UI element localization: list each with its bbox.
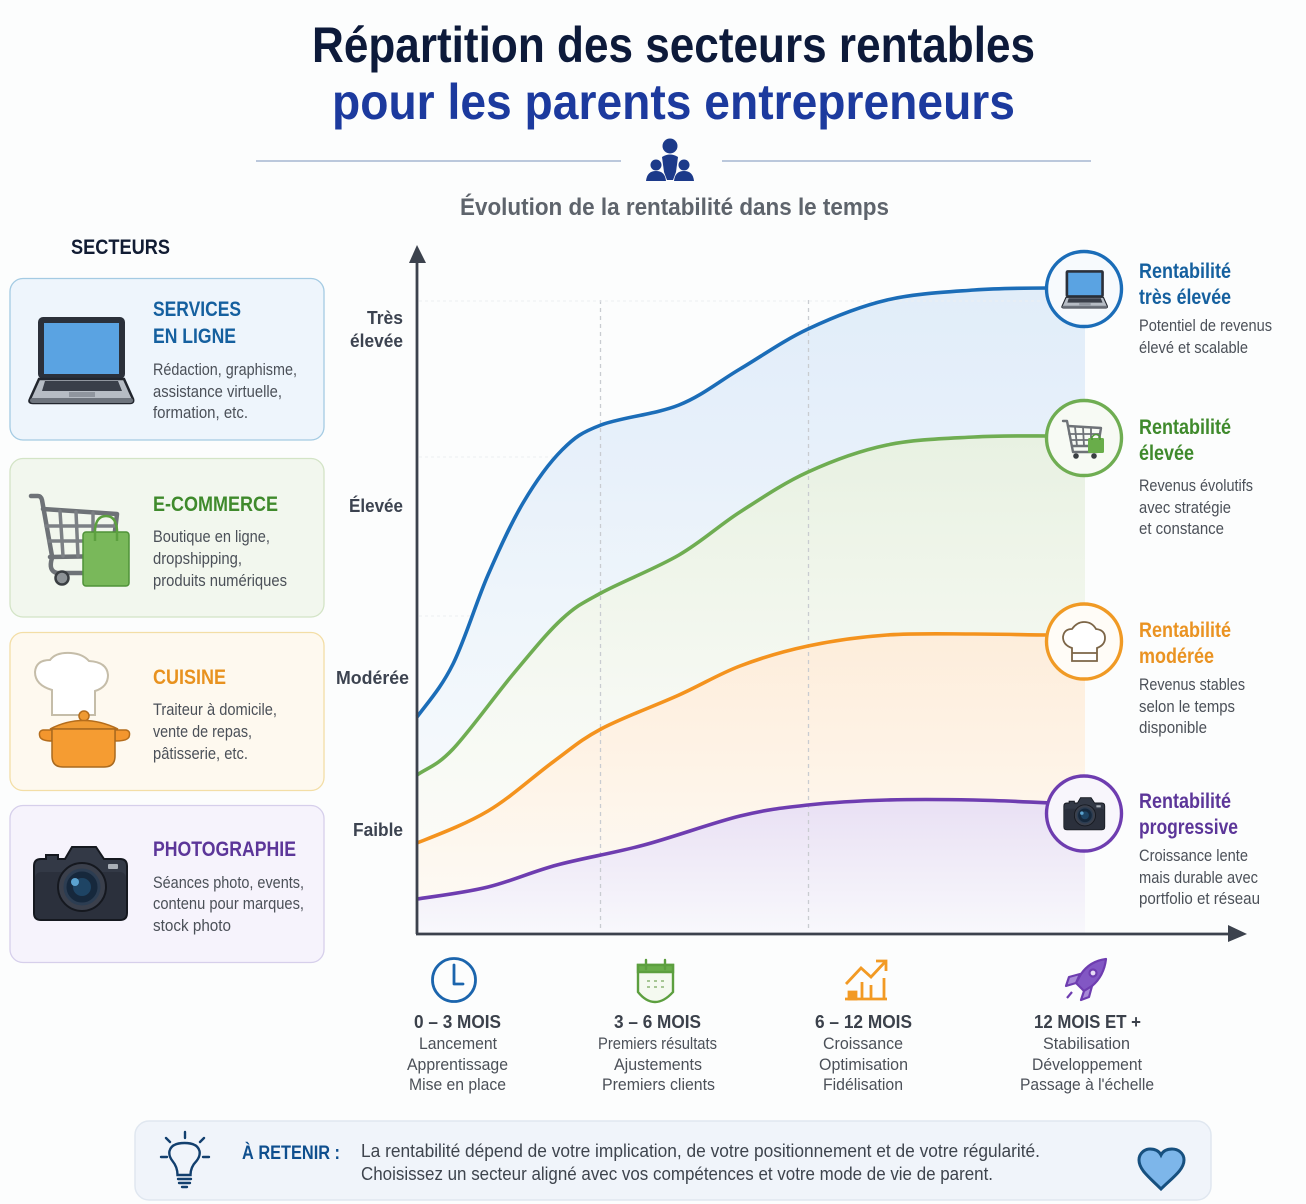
time phase: 3-6 mois: 3 – 6 MOIS bbox=[614, 1012, 701, 1032]
outcome label: progressive: mais durable avec bbox=[1139, 869, 1258, 887]
sector text: photographie bbox=[153, 838, 304, 935]
x axis arrow bbox=[416, 925, 1247, 942]
panel: services en ligne bbox=[10, 278, 324, 440]
y axis labels: Modérée bbox=[336, 668, 409, 688]
time phase: 12 mois et + bbox=[1020, 1012, 1154, 1094]
panel: e-commerce bbox=[10, 458, 324, 617]
time phase: 3-6 mois: Premiers clients bbox=[602, 1075, 715, 1094]
sector text: services en ligne: EN LIGNE bbox=[153, 325, 236, 348]
time phase: 12 mois et +: 12 MOIS ET + bbox=[1034, 1012, 1141, 1032]
header divider bbox=[256, 160, 1091, 162]
outcome label: élevée: avec stratégie bbox=[1139, 499, 1231, 517]
sector text: photographie: contenu pour marques, bbox=[153, 895, 304, 913]
callout text: Choisissez un secteur aligné avec vos compétences et votre mode de vie de parent. bbox=[361, 1164, 993, 1184]
time phase: 0-3 mois: Apprentissage bbox=[407, 1055, 508, 1074]
outcome label: progressive: portfolio et réseau bbox=[1139, 890, 1260, 908]
title bbox=[312, 17, 1035, 130]
sector text: e-commerce: E-COMMERCE bbox=[153, 493, 278, 516]
sector text: e-commerce: dropshipping, bbox=[153, 550, 242, 568]
icon: lightbulb bbox=[161, 1132, 209, 1187]
time phase: 6-12 mois bbox=[815, 1012, 912, 1094]
icon: chef hat and pot bbox=[35, 653, 130, 767]
sector text: e-commerce: Boutique en ligne, bbox=[153, 528, 270, 546]
outcome label: modérée: Rentabilité bbox=[1139, 619, 1231, 642]
curve: e-commerce bbox=[417, 436, 1050, 775]
sector text: services en ligne: assistance virtuelle, bbox=[153, 383, 282, 401]
callout: à retenir bbox=[135, 1121, 1211, 1200]
icon: cart and bag bbox=[31, 496, 129, 586]
panel: cuisine bbox=[10, 632, 324, 790]
time phase: 0-3 mois: Lancement bbox=[419, 1034, 497, 1053]
sector text: cuisine: CUISINE bbox=[153, 666, 226, 689]
sector text: services en ligne: SERVICES bbox=[153, 298, 241, 321]
icon: camera bbox=[34, 847, 127, 920]
outcome label: très élevée: élevé et scalable bbox=[1139, 339, 1248, 357]
y axis labels: Élevée bbox=[349, 495, 403, 516]
outcome label: modérée: modérée bbox=[1139, 645, 1214, 668]
curve: photographie bbox=[417, 800, 1050, 899]
sector text: e-commerce: produits numériques bbox=[153, 572, 287, 590]
time phase: 0-3 mois: Mise en place bbox=[409, 1075, 506, 1094]
time phase: 12 mois et +: Développement bbox=[1032, 1055, 1142, 1074]
curve: services en ligne bbox=[417, 288, 1050, 717]
outcome label: très élevée bbox=[1139, 260, 1272, 357]
outcome label: élevée: Rentabilité bbox=[1139, 416, 1231, 439]
curve: cuisine bbox=[417, 634, 1050, 843]
marker: laptop bbox=[1046, 252, 1122, 326]
sector text: services en ligne bbox=[153, 298, 297, 422]
outcome label: progressive: progressive bbox=[1139, 816, 1238, 839]
icon: heart bbox=[1139, 1149, 1184, 1189]
title: pour les parents entrepreneurs bbox=[332, 74, 1015, 130]
icon: family bbox=[646, 138, 694, 181]
time phase: 12 mois et +: Passage à l'échelle bbox=[1020, 1075, 1154, 1094]
outcome label: très élevée: Potentiel de revenus bbox=[1139, 317, 1272, 335]
time phase: 3-6 mois: Ajustements bbox=[614, 1055, 702, 1074]
time phase: 6-12 mois: 6 – 12 MOIS bbox=[815, 1012, 912, 1032]
outcome label: modérée: Revenus stables bbox=[1139, 676, 1245, 694]
icon: calendar bbox=[638, 960, 673, 1002]
line chart bbox=[417, 288, 1085, 934]
icon: clock bbox=[432, 958, 476, 1002]
time phase: 6-12 mois: Optimisation bbox=[819, 1055, 908, 1074]
sector text: cuisine bbox=[153, 666, 277, 763]
outcome label: élevée: élevée bbox=[1139, 442, 1194, 465]
sectors heading: SECTEURS bbox=[71, 236, 170, 259]
outcome label: modérée: selon le temps bbox=[1139, 698, 1235, 716]
time phase: 0-3 mois bbox=[407, 1012, 508, 1094]
marker: cart bbox=[1046, 400, 1122, 476]
time phase: 6-12 mois: Croissance bbox=[823, 1034, 903, 1053]
sector text: services en ligne: Rédaction, graphisme, bbox=[153, 361, 297, 379]
callout label: À RETENIR : bbox=[242, 1142, 340, 1164]
time phase: 0-3 mois: 0 – 3 MOIS bbox=[414, 1012, 501, 1032]
time phase: 6-12 mois: Fidélisation bbox=[823, 1075, 903, 1094]
outcome label: progressive: Rentabilité bbox=[1139, 790, 1231, 813]
outcome label: modérée bbox=[1139, 619, 1245, 737]
outcome label: très élevée: Rentabilité bbox=[1139, 260, 1231, 283]
sector text: cuisine: pâtisserie, etc. bbox=[153, 745, 248, 763]
subtitle: Évolution de la rentabilité dans le temps bbox=[460, 193, 889, 221]
outcome label: très élevée: très élevée bbox=[1139, 286, 1231, 309]
y axis labels: Faible bbox=[353, 820, 403, 840]
sector text: services en ligne: formation, etc. bbox=[153, 404, 248, 422]
outcome label: élevée: Revenus évolutifs bbox=[1139, 477, 1253, 495]
time phase: 12 mois et +: Stabilisation bbox=[1043, 1034, 1130, 1053]
marker: camera bbox=[1046, 776, 1122, 851]
callout text bbox=[361, 1141, 1040, 1184]
sector text: cuisine: Traiteur à domicile, bbox=[153, 701, 277, 719]
title: Répartition des secteurs rentables bbox=[312, 17, 1035, 73]
icon: rocket bbox=[1066, 959, 1106, 1000]
time phase: 3-6 mois bbox=[598, 1012, 717, 1094]
y axis labels: élevée bbox=[350, 331, 403, 351]
sector text: photographie: Séances photo, events, bbox=[153, 874, 304, 892]
panel: photographie bbox=[10, 806, 324, 962]
icon: growth chart bbox=[845, 961, 887, 999]
outcome label: élevée: et constance bbox=[1139, 520, 1224, 538]
icon: laptop bbox=[29, 317, 133, 403]
sector text: cuisine: vente de repas, bbox=[153, 723, 252, 741]
outcome label: modérée: disponible bbox=[1139, 719, 1207, 737]
area fills bbox=[417, 288, 1085, 934]
sector text: e-commerce bbox=[153, 493, 287, 590]
callout text: La rentabilité dépend de votre implication, de votre positionnement et de votre régularité. bbox=[361, 1141, 1040, 1161]
sector text: photographie: PHOTOGRAPHIE bbox=[153, 838, 296, 861]
y axis arrow bbox=[409, 245, 426, 934]
outcome label: élevée bbox=[1139, 416, 1253, 538]
marker: chef hat bbox=[1046, 604, 1122, 679]
y axis labels bbox=[336, 308, 409, 840]
outcome label: progressive bbox=[1139, 790, 1260, 908]
y axis labels: Très bbox=[367, 308, 403, 328]
sector text: photographie: stock photo bbox=[153, 917, 231, 935]
time phase: 3-6 mois: Premiers résultats bbox=[598, 1034, 717, 1053]
outcome label: progressive: Croissance lente bbox=[1139, 847, 1248, 865]
